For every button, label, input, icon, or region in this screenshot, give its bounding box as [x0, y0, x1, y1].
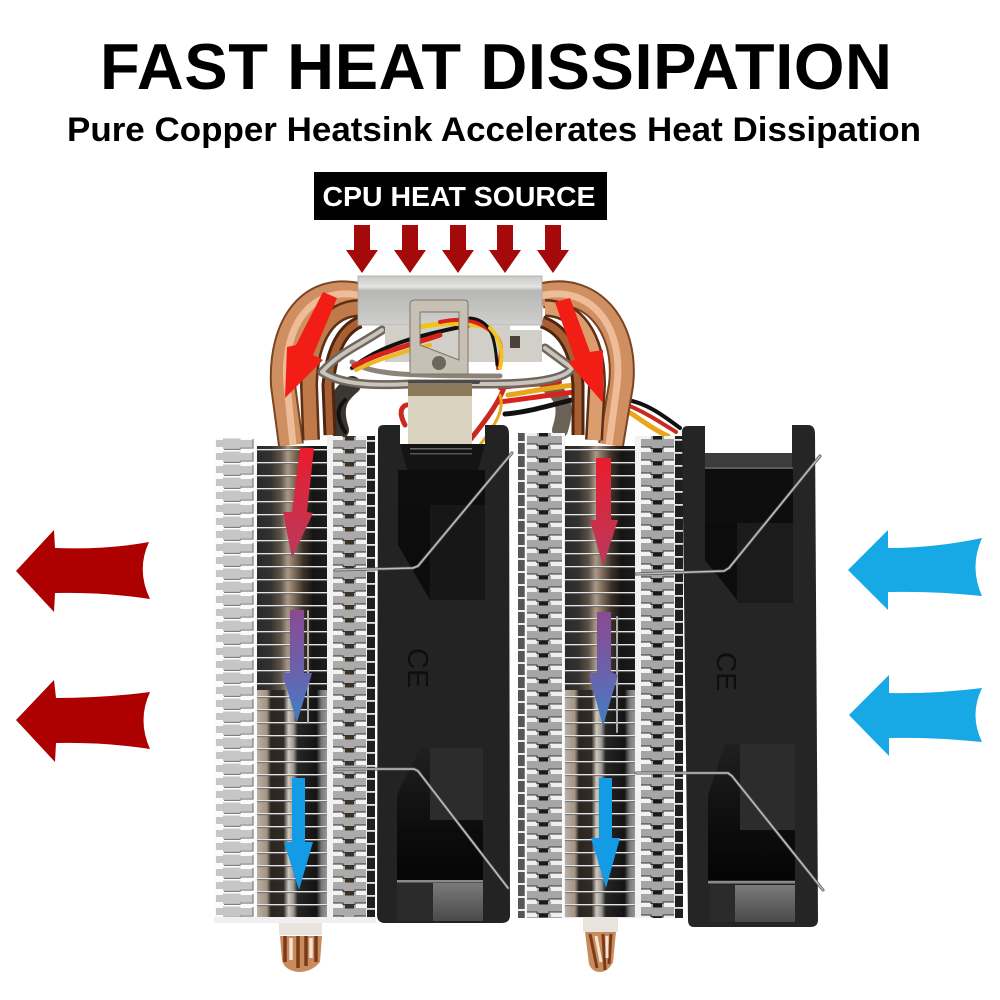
arrows: heat travelling down heatsink 2 — [589, 458, 620, 888]
fan cable through bracket — [352, 318, 501, 370]
icon: five heat arrows pointing down — [346, 225, 569, 273]
metal retention bracket — [408, 300, 472, 444]
copper heat pipes: right — [540, 293, 622, 445]
CE mark: CE — [401, 648, 433, 688]
arrow: heat flow into left pipes — [285, 292, 337, 398]
copper pipe ends: heatsink 2 — [583, 918, 618, 972]
arrow: hot air out, lower — [16, 680, 150, 762]
arrow: heat flow into right pipes — [555, 298, 603, 403]
CE mark: CE — [711, 652, 742, 691]
retention wire clips — [308, 453, 823, 890]
arrow: cool air in, upper — [848, 530, 982, 610]
label: CPU heat source — [314, 172, 607, 220]
copper heat pipes: left — [283, 293, 362, 445]
heatsink 2: fin stack — [518, 433, 683, 918]
heatsink 1: fin stack — [214, 436, 376, 923]
fan 1 — [377, 425, 510, 923]
arrow: cool air in, lower — [849, 675, 982, 756]
cable bundle behind the pipes — [337, 382, 680, 445]
arrow: hot air out, upper — [16, 530, 150, 612]
label: CPU heat source: CPU HEAT SOURCE — [322, 181, 596, 212]
mounting spreader plate — [322, 330, 572, 385]
fan 2 — [682, 425, 818, 927]
arrows: heat travelling down heatsink 1 — [282, 448, 314, 890]
copper pipe ends: heatsink 1 — [279, 923, 322, 972]
title: FAST HEAT DISSIPATION — [100, 30, 892, 103]
aluminium heat block — [358, 276, 542, 362]
subtitle: Pure Copper Heatsink Accelerates Heat Dissipation — [67, 111, 921, 149]
